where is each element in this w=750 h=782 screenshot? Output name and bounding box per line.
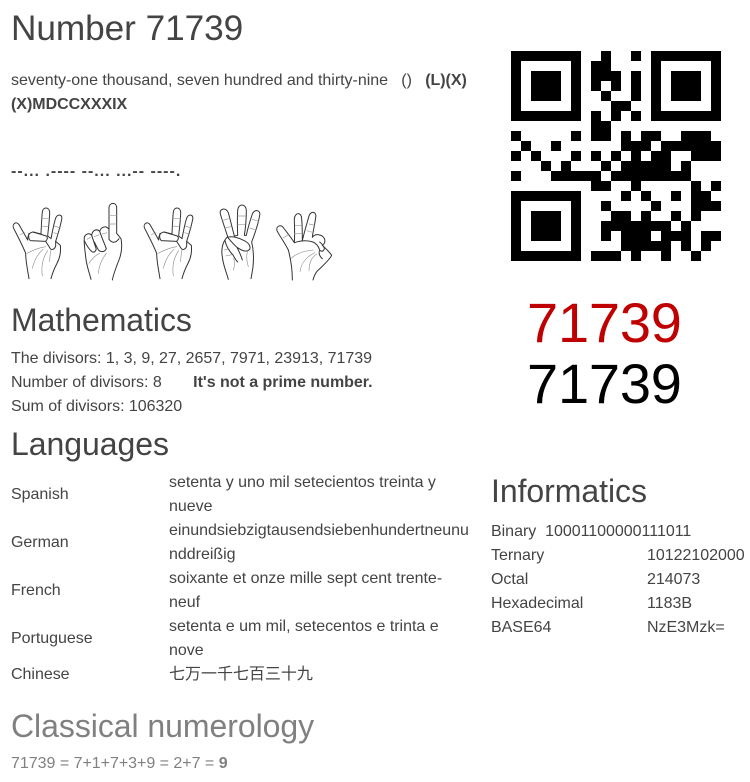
base64 (491, 619, 725, 636)
number in red: 71739 (527, 291, 682, 354)
Spanish row: nueve (169, 498, 212, 515)
morse code: --... .---- --... ...-- ----. (11, 163, 181, 180)
icon: hand 3 (220, 205, 260, 279)
number name and roman numeral: seventy-one thousand, seven hundred and thirty-nine () (L)(X) (11, 72, 467, 89)
mathematics facts (11, 350, 373, 415)
German row: nddreißig (169, 546, 236, 563)
mathematics facts: The divisors: 1, 3, 9, 27, 2657, 7971, 23913, 71739 (11, 350, 372, 367)
mathematics facts: Sum of divisors: 106320 (11, 398, 182, 415)
French row: neuf (169, 594, 200, 611)
icon: hand 7 (13, 208, 62, 279)
icon: hand 7 repeat (144, 208, 193, 279)
Portuguese row: setenta e um mil, setecentos e trinta e (169, 618, 439, 635)
number name and roman numeral (11, 72, 467, 113)
QR code (511, 51, 721, 261)
Chinese row (11, 665, 313, 683)
Spanish row (11, 474, 436, 515)
Portuguese row: Portuguese (11, 630, 93, 647)
French row: soixante et onze mille sept cent trente- (169, 570, 442, 587)
languages table (11, 474, 469, 683)
Portuguese row: nove (169, 642, 204, 659)
ternary: 10122102000 (647, 547, 745, 564)
heading: Mathematics: Mathematics (11, 302, 192, 338)
number name and roman numeral: (X)MDCCXXXIX (11, 96, 127, 113)
German row: einundsiebzigtausendsiebenhundertneunu (169, 522, 469, 539)
mathematics facts: Number of divisors: 8 It's not a prime number. (11, 374, 373, 391)
base64: NzE3Mzk= (647, 619, 725, 636)
octal (491, 571, 700, 588)
Spanish row: Spanish (11, 486, 69, 503)
heading: Languages: Languages (11, 426, 169, 462)
icon: hand 1 (84, 203, 122, 280)
heading: Informatics: Informatics (491, 473, 647, 509)
ternary (491, 547, 745, 564)
binary: Binary 10001100000111011 (491, 523, 691, 540)
number in black: 71739 (527, 352, 682, 415)
Spanish row: setenta y uno mil setecientos treinta y (169, 474, 436, 491)
icon: sign language hands (12, 202, 332, 280)
base64: BASE64 (491, 619, 551, 636)
informatics table (491, 523, 745, 636)
title: Number 71739 (11, 9, 243, 48)
numerology sum: 71739 = 7+1+7+3+9 = 2+7 = 9 (11, 755, 228, 772)
Portuguese row (11, 618, 439, 659)
German row: German (11, 534, 69, 551)
French row: French (11, 582, 61, 599)
octal: 214073 (647, 571, 700, 588)
hexadecimal: Hexadecimal (491, 595, 583, 612)
Chinese row: Chinese (11, 666, 70, 683)
ternary: Ternary (491, 547, 544, 564)
hexadecimal: 1183B (647, 595, 692, 612)
heading: Classical numerology: Classical numerology (11, 708, 314, 744)
French row (11, 570, 442, 611)
Chinese row: 七万一千七百三十九 (169, 666, 313, 683)
German row (11, 522, 469, 563)
octal: Octal (491, 571, 528, 588)
icon: hand 9 (277, 212, 332, 280)
hexadecimal (491, 595, 692, 612)
